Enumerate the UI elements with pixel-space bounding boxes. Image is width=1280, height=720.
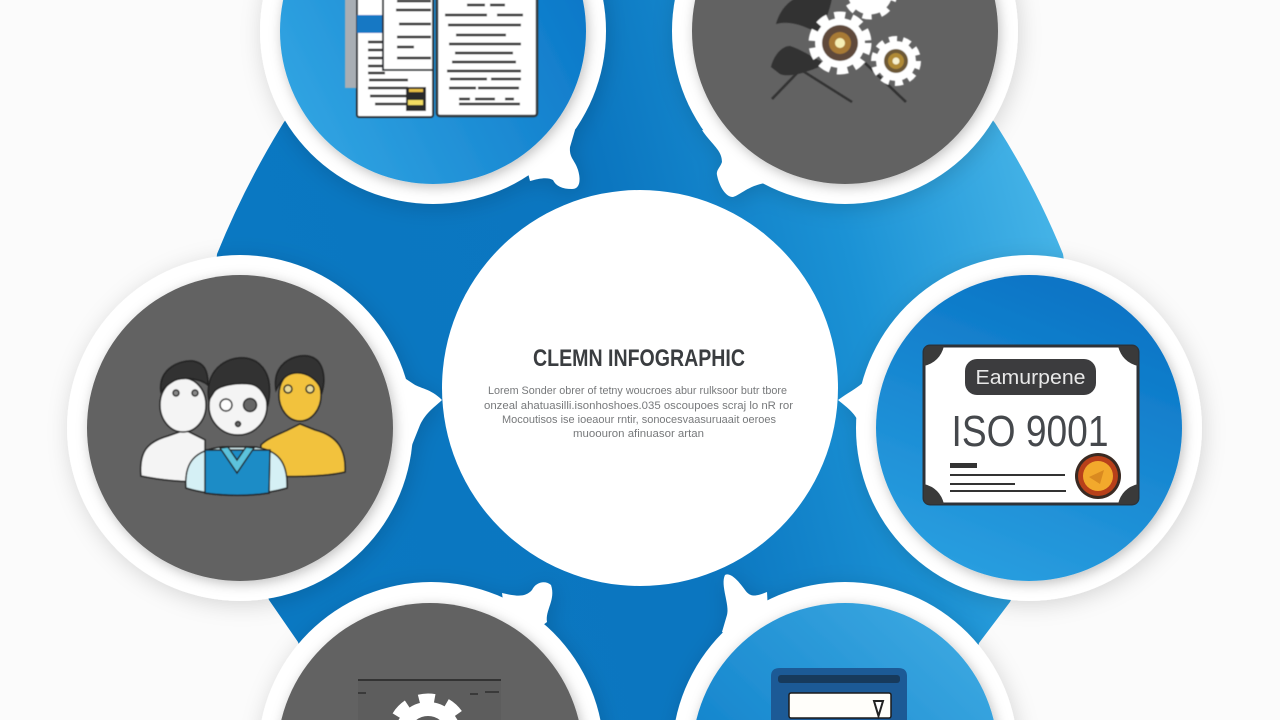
central panel [442, 190, 838, 586]
description text: onzeal ahatuasilli.isonhoshoes.035 oscoupoes scraj lo nR ror [484, 400, 793, 412]
description text: Mocoutisos ise ioeaour rntir, sonocesvaasuruaait oeroes [502, 414, 776, 426]
node: settings [258, 582, 604, 720]
node: team [67, 255, 442, 601]
blue hexagonal backdrop [200, 0, 1090, 720]
node: documents [260, 0, 606, 204]
title: CLEMN INFOGRAPHIC [533, 345, 745, 372]
description text: Lorem Sonder obrer of tetny woucroes abur rulksoor butr tbore [488, 385, 787, 397]
icon: open documents [345, 0, 537, 117]
icon: certificate [924, 346, 1138, 504]
node: gears [672, 0, 1018, 204]
icon: certificate: ISO 9001 [952, 407, 1108, 456]
icon: device panel [771, 668, 907, 720]
description text: muoouron afinuasor artan [573, 428, 704, 440]
node: ISO certificate [838, 255, 1202, 601]
description text [484, 385, 793, 440]
node: device [672, 574, 1018, 720]
icon: gears and tools [771, 0, 918, 102]
icon: three people [141, 356, 345, 495]
icon: settings gear [358, 680, 501, 720]
icon: certificate: Eamurpene [976, 367, 1086, 389]
